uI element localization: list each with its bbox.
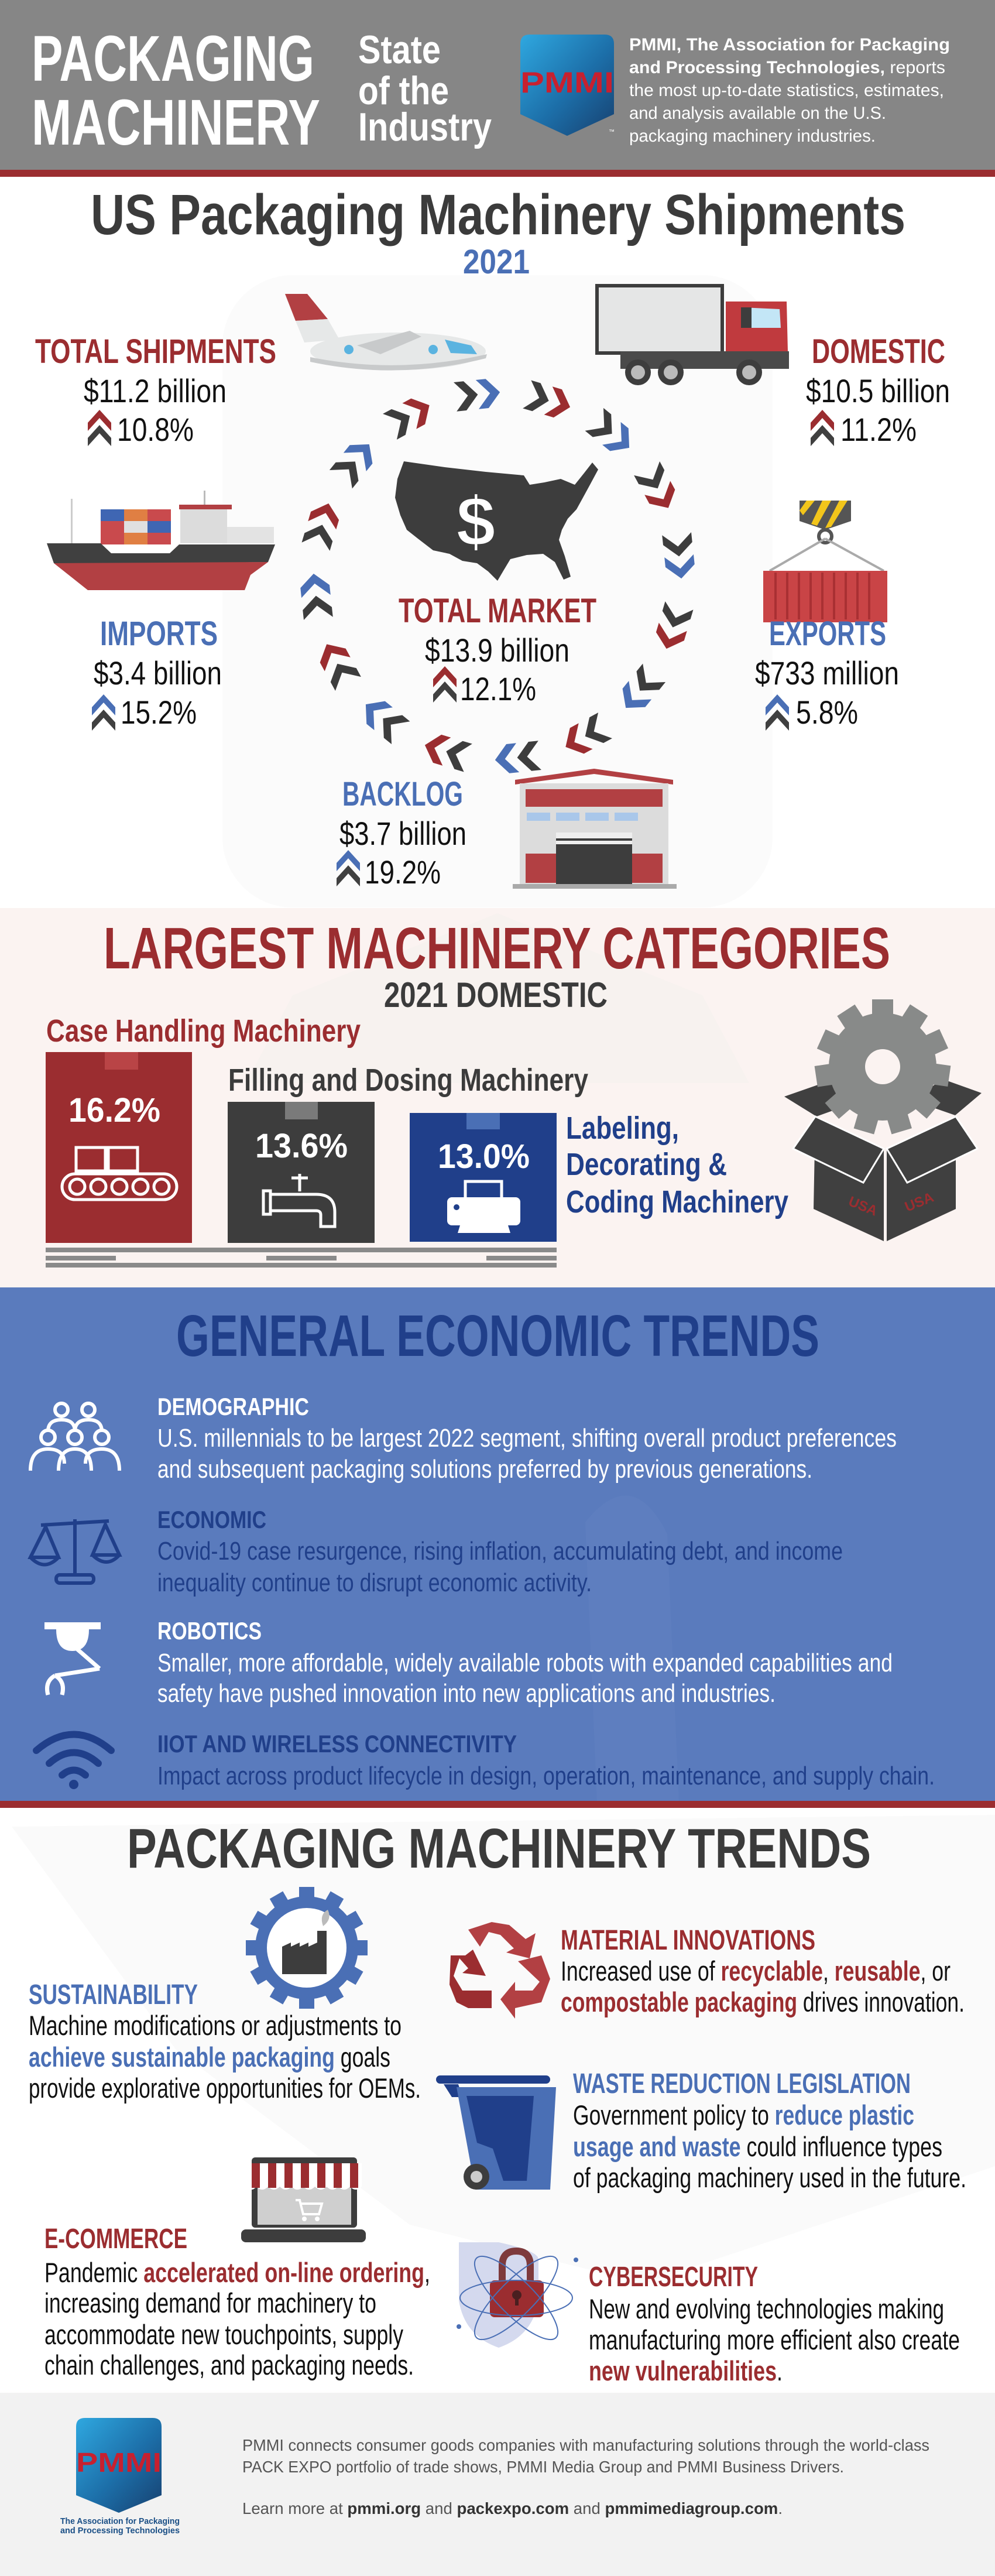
header description: PMMI, The Association for Packaging	[629, 35, 950, 54]
trend: sustainability: Machine modifications or adjustments to	[29, 2010, 402, 2041]
header description	[629, 35, 950, 146]
stat: imports: 15.2%	[121, 694, 197, 731]
stat: domestic: 11.2%	[840, 411, 917, 448]
stat: imports: IMPORTS	[100, 615, 218, 653]
trend: robotics	[44, 1617, 893, 1708]
header title: PACKAGING	[32, 23, 314, 95]
footer logo: PMMI	[76, 2447, 162, 2478]
stat: exports: EXPORTS	[769, 615, 886, 653]
panel: largest machinery categories	[0, 908, 995, 1287]
stat: exports	[755, 615, 899, 731]
trend: economic: ECONOMIC	[157, 1506, 266, 1533]
trend: waste reduction legislation: Government policy to reduce plastic	[573, 2099, 914, 2130]
footer text: Learn more at pmmi.org and packexpo.com and pmmimediagroup.com.	[242, 2499, 783, 2517]
icon: shipping container on crane hook	[763, 501, 887, 622]
icon: warehouse	[513, 769, 677, 889]
footer text: PMMI connects consumer goods companies with manufacturing solutions through the world-class	[242, 2436, 929, 2454]
header description: packaging machinery industries.	[629, 126, 876, 146]
heading: largest categories	[104, 916, 890, 1015]
trend: economic	[30, 1506, 843, 1597]
header description: and analysis available on the U.S.	[629, 104, 886, 123]
category: labeling: Labeling,	[566, 1111, 679, 1146]
icon: truck	[597, 286, 789, 385]
footer logo: and Processing Technologies	[60, 2526, 180, 2536]
header title	[32, 23, 320, 159]
icon: recycle	[450, 1922, 550, 2019]
stat: imports	[92, 615, 222, 731]
stat: backlog: BACKLOG	[342, 775, 463, 813]
header subtitle	[358, 28, 492, 149]
icon: US map with dollar	[395, 461, 598, 581]
stat: total shipments: TOTAL SHIPMENTS	[35, 333, 276, 371]
stat: total market	[399, 592, 596, 707]
heading: largest categories: 2021 DOMESTIC	[384, 975, 608, 1015]
trend: cybersecurity: new vulnerabilities.	[589, 2355, 783, 2386]
trend: e-commerce: accommodate new touchpoints, supply	[44, 2319, 403, 2350]
header subtitle: Industry	[358, 105, 492, 149]
stat: domestic: DOMESTIC	[812, 333, 945, 371]
logo: PMMI shield: ™	[609, 129, 615, 135]
title: US Packaging Machinery Shipments: 2021	[463, 243, 530, 281]
icon: gear in box: USA	[903, 1190, 936, 1215]
stat: exports: 5.8%	[796, 694, 858, 731]
stat: exports: $733 million	[755, 655, 899, 691]
section background watermark	[222, 275, 773, 907]
category: filling and dosing: Filling and Dosing Machinery	[228, 1063, 588, 1098]
icon: trash bin	[436, 2075, 556, 2190]
footer	[0, 2393, 995, 2576]
stat: total shipments	[35, 333, 276, 448]
trend: waste reduction legislation	[436, 2068, 966, 2193]
stat: domestic: $10.5 billion	[806, 372, 950, 409]
trend: cybersecurity	[457, 2242, 960, 2386]
panel: general economic trends	[0, 1287, 995, 1802]
category: filling and dosing: 13.6%	[255, 1127, 348, 1165]
trend: e-commerce: E-COMMERCE	[44, 2224, 187, 2255]
category: labeling: 13.0%	[438, 1138, 530, 1176]
stat: backlog	[337, 775, 466, 890]
trend: demographic	[30, 1393, 897, 1484]
stat: total market: $13.9 billion	[425, 632, 569, 669]
chevron ring	[299, 378, 696, 775]
header description: and Processing Technologies, reports	[629, 58, 945, 77]
title: US Packaging Machinery Shipments	[91, 183, 905, 281]
trend: robotics: safety have pushed innovation into new applications and industries.	[157, 1679, 776, 1708]
category: labeling: Decorating &	[566, 1147, 727, 1182]
category: filling and dosing	[228, 1063, 588, 1243]
stat: total shipments: $11.2 billion	[84, 372, 227, 409]
trend: robotics: ROBOTICS	[157, 1617, 262, 1645]
icon: lock in shield	[457, 2242, 578, 2350]
trend: IIoT: IIOT AND WIRELESS CONNECTIVITY	[157, 1730, 517, 1758]
footer logo: The Association for Packaging	[60, 2516, 180, 2526]
header title: MACHINERY	[32, 87, 320, 159]
trend: waste reduction legislation: usage and waste could influence types	[573, 2131, 942, 2162]
footer text: PACK EXPO portfolio of trade shows, PMMI Media Group and PMMI Business Drivers.	[242, 2458, 844, 2476]
logo: PMMI shield: PMMI	[520, 66, 614, 99]
category: labeling: Coding Machinery	[566, 1184, 788, 1220]
trend: demographic: DEMOGRAPHIC	[157, 1393, 309, 1420]
trend: material innovations	[450, 1922, 965, 2019]
stat: domestic	[806, 333, 950, 448]
trend: material innovations: MATERIAL INNOVATIONS	[561, 1925, 815, 1956]
pallet	[46, 1248, 557, 1268]
trend: sustainability: provide explorative opportunities for OEMs.	[29, 2073, 421, 2104]
category: case handling: Case Handling Machinery	[46, 1013, 361, 1049]
category: case handling: 16.2%	[68, 1091, 160, 1129]
panel watermark	[12, 1815, 995, 2283]
trend: e-commerce: increasing demand for machinery to	[44, 2287, 376, 2318]
stat: total market: 12.1%	[460, 670, 536, 707]
trend: material innovations: Increased use of recyclable, reusable, or	[561, 1955, 951, 1986]
trend: e-commerce	[44, 2157, 430, 2380]
stat: total market: TOTAL MARKET	[399, 592, 596, 630]
stat: backlog: $3.7 billion	[339, 815, 466, 852]
header subtitle: of the	[358, 68, 449, 113]
trend: sustainability: SUSTAINABILITY	[29, 1979, 198, 2010]
icon: cargo ship	[47, 491, 275, 590]
icon: US map with dollar: $	[457, 482, 495, 561]
trend: e-commerce: Pandemic accelerated on-line ordering,	[44, 2257, 430, 2288]
stat: total shipments: 10.8%	[117, 411, 194, 448]
trend: IIoT	[36, 1730, 935, 1790]
trend: economic: inequality continue to disrupt economic activity.	[157, 1568, 592, 1597]
trend: cybersecurity: CYBERSECURITY	[589, 2262, 758, 2293]
trend: sustainability: achieve sustainable packaging goals	[29, 2041, 390, 2073]
trend: sustainability	[29, 1887, 421, 2104]
icon: laptop storefront	[241, 2157, 366, 2242]
stat: backlog: 19.2%	[365, 854, 441, 890]
icon: airplane	[285, 294, 487, 371]
footer logo	[60, 2418, 180, 2536]
icon: gear in box	[784, 999, 982, 1241]
icon: gear in box: USA	[846, 1194, 880, 1220]
stat: imports: $3.4 billion	[94, 655, 222, 691]
trend: e-commerce: chain challenges, and packaging needs.	[44, 2349, 414, 2380]
category: case handling	[46, 1013, 361, 1243]
header subtitle: State	[358, 28, 441, 72]
trend: economic: Covid-19 case resurgence, rising inflation, accumulating debt, and income	[157, 1537, 843, 1566]
logo: PMMI shield	[520, 35, 615, 136]
header description: the most up-to-date statistics, estimates,	[629, 81, 944, 100]
header band	[0, 0, 995, 177]
icon: gear factory	[246, 1887, 368, 2009]
category: labeling	[410, 1111, 788, 1242]
footer text	[242, 2436, 929, 2517]
trend: demographic: and subsequent packaging solutions preferred by previous generations.	[157, 1455, 812, 1484]
